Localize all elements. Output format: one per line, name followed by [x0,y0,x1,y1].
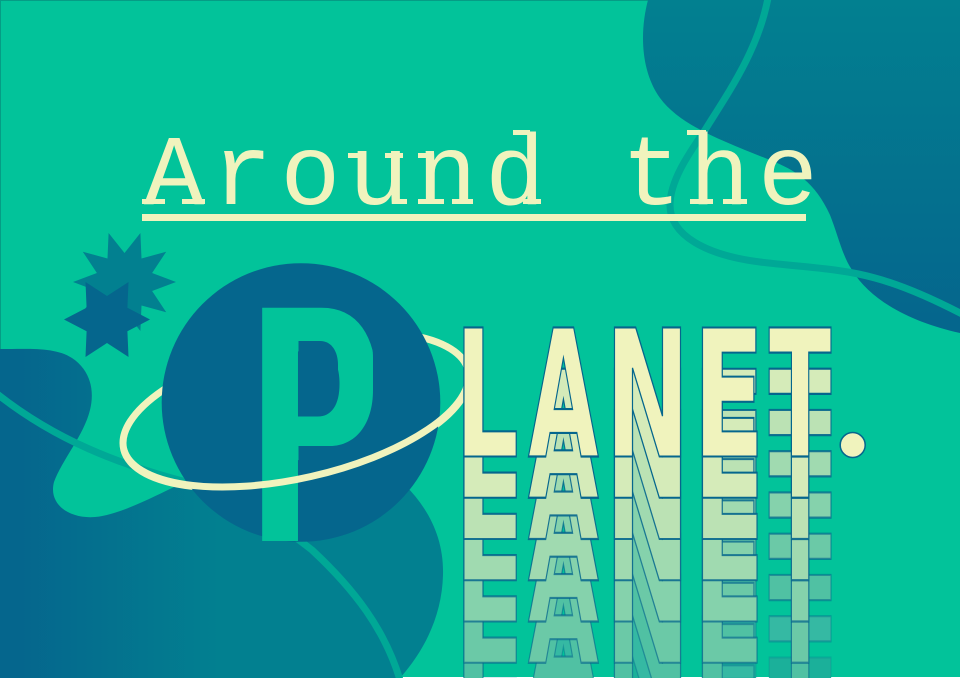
word: PLANET stacked echoes: N [605,333,690,540]
word: PLANET stacked echoes: E [693,459,765,664]
word: PLANET stacked echoes: A [528,458,599,664]
letter P: P [245,246,384,618]
icon: large star [73,233,176,331]
word: PLANET stacked echoes: T [769,293,831,499]
word: PLANET stacked echoes: N [605,416,690,622]
word: PLANET stacked echoes: E [693,335,765,540]
dot after PLANET [840,432,865,458]
word: PLANET stacked echoes: E [693,417,765,623]
word: PLANET stacked echoes: A [528,293,599,499]
word: PLANET stacked echoes: E [693,294,765,499]
word: PLANET stacked echoes: A [528,334,599,540]
word: PLANET stacked echoes: L [455,457,519,663]
word: PLANET stacked echoes: N [605,457,690,663]
title: Around the [144,122,826,235]
icon: small star [64,282,150,357]
word: PLANET stacked echoes: N [605,374,690,581]
word: PLANET stacked echoes: T [769,376,831,582]
word: PLANET stacked echoes: L [455,292,519,498]
planet ring: back [108,303,484,517]
planet [162,263,440,542]
word: PLANET stacked echoes: A [528,417,599,623]
word: PLANET stacked echoes: L [455,333,519,540]
word: PLANET stacked echoes: T [769,458,831,664]
word: PLANET stacked echoes: A [528,376,599,582]
word: PLANET stacked echoes: T [769,417,831,623]
word: PLANET stacked echoes: E [693,376,765,582]
word: PLANET stacked echoes: L [455,374,519,581]
blob: bottom left [0,349,443,678]
word: PLANET stacked echoes [455,292,831,678]
line: top right swoosh [670,0,960,314]
word: PLANET stacked echoes: N [605,292,690,498]
word: PLANET stacked echoes: T [769,335,831,540]
blob: top right [643,0,960,333]
planet ring: front [124,371,469,487]
line: bottom left swoosh [0,393,400,678]
word: PLANET stacked echoes: L [455,416,519,622]
